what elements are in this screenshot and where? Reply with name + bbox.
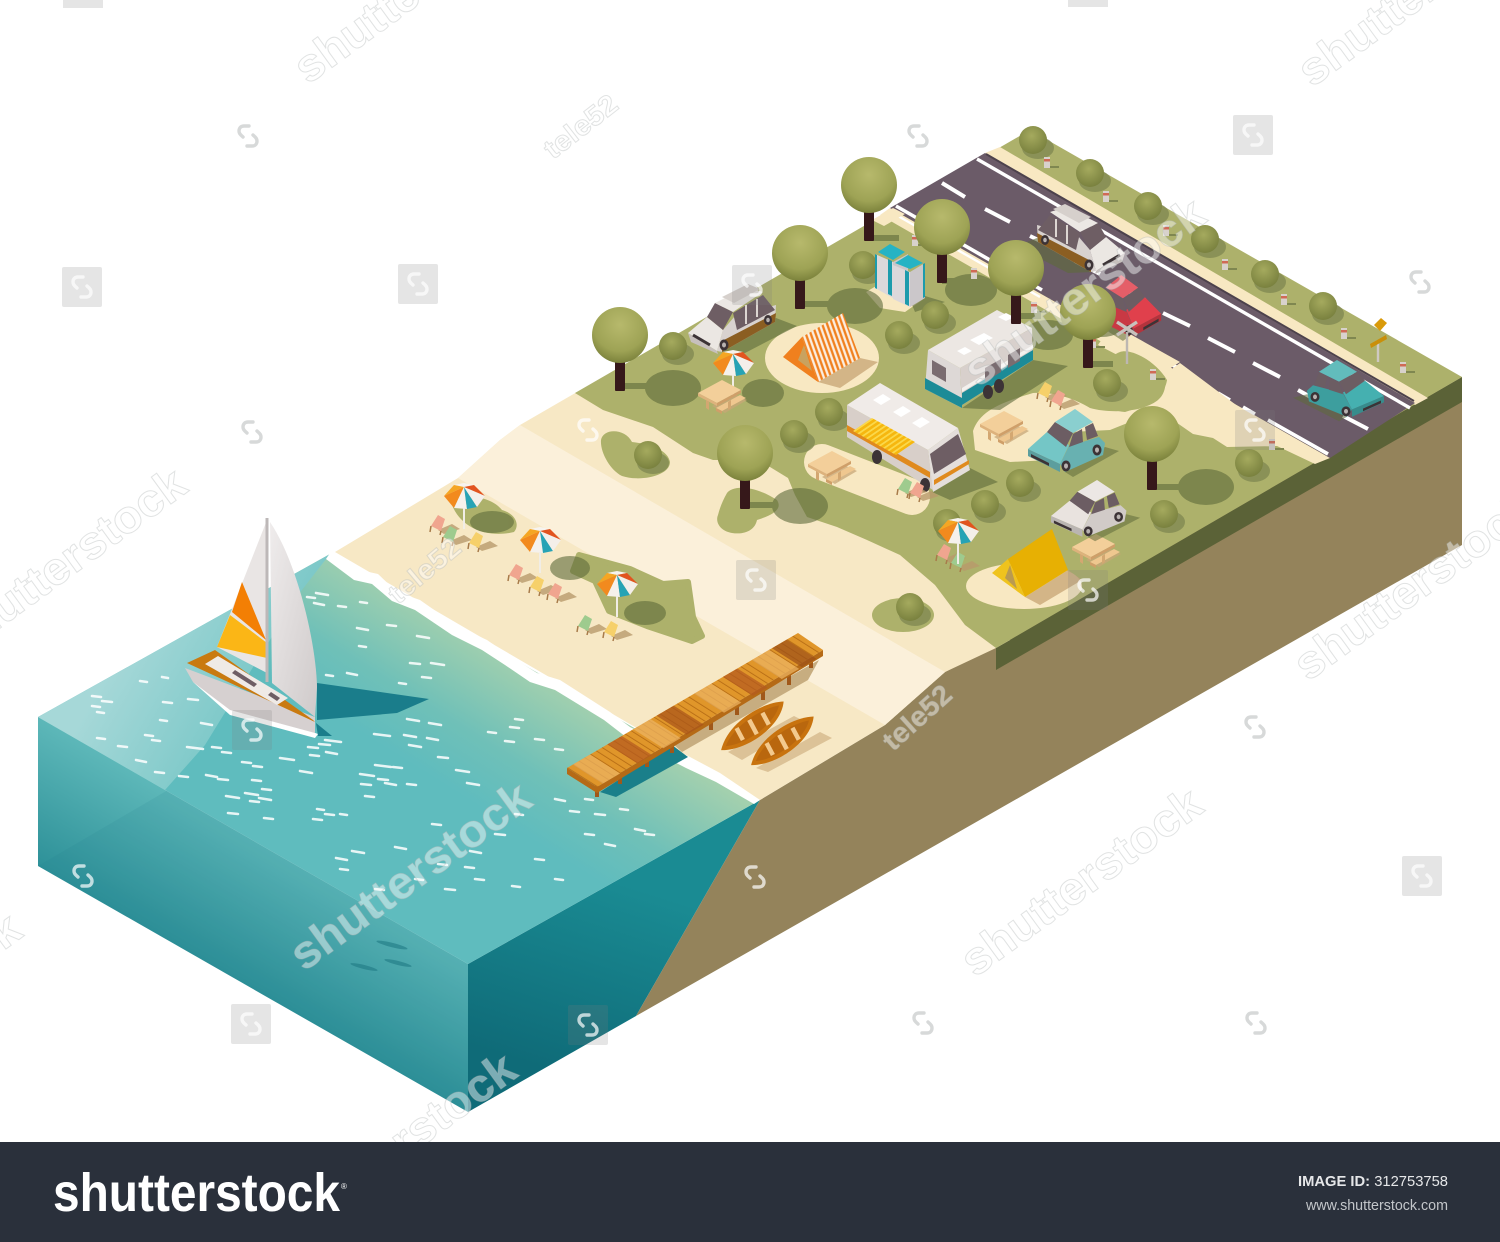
toilet pad xyxy=(866,276,925,312)
toilet 1 xyxy=(875,254,893,298)
grass patch by umbrella 1 xyxy=(452,497,517,534)
red car xyxy=(1084,275,1161,341)
tele52 watermarks: tele52 xyxy=(538,88,624,165)
roadside bollards xyxy=(912,157,1415,450)
dock posts xyxy=(597,660,811,797)
shallow water wedge xyxy=(38,554,330,790)
faint swirl marks on white xyxy=(239,126,1429,1033)
motorhome xyxy=(847,383,970,492)
rowing boat 2 xyxy=(742,712,823,771)
deck cabin xyxy=(205,656,288,705)
dock plank tones xyxy=(573,640,816,784)
shutterstock watermarks: shutterstock xyxy=(953,186,1215,396)
orange tent xyxy=(783,313,878,388)
trailer side xyxy=(960,328,1033,405)
grass patch under bush xyxy=(872,598,934,632)
sail yellow panel xyxy=(217,615,267,658)
tele52 watermarks: tele52 xyxy=(382,531,467,610)
lower beach xyxy=(335,380,1010,800)
footer logo: shutterstock xyxy=(53,1163,341,1223)
footer bar xyxy=(0,1142,1500,1242)
bush row back xyxy=(1019,126,1054,159)
sand path to road xyxy=(973,363,1315,464)
awning xyxy=(853,418,915,455)
picnic tables and umbrellas camp xyxy=(698,350,1121,568)
grass island by road xyxy=(1092,351,1167,412)
motorhome wheels xyxy=(872,450,882,464)
cliff brown side xyxy=(636,377,1462,1016)
road cars xyxy=(1016,204,1384,421)
deck wood xyxy=(187,650,315,722)
water ripples xyxy=(92,593,654,890)
yellow tent xyxy=(992,529,1082,605)
centre dashes xyxy=(942,183,1368,429)
shoulder patch xyxy=(1098,324,1180,376)
sail shadow xyxy=(317,683,429,720)
shoulder inset near tree xyxy=(872,208,905,226)
asphalt xyxy=(890,153,1415,458)
fish silhouettes xyxy=(350,939,412,972)
trailer roof xyxy=(928,310,1032,368)
grass patch under lower tree xyxy=(717,488,779,533)
dock deck xyxy=(567,633,823,787)
sail orange panel xyxy=(232,582,266,640)
tent striped roof xyxy=(802,313,860,382)
teal car on road xyxy=(1293,360,1384,421)
water block xyxy=(38,554,760,1112)
ground shadows xyxy=(470,238,1234,625)
road xyxy=(880,147,1428,464)
jib sail xyxy=(270,522,317,717)
grass side band xyxy=(996,377,1462,670)
toilet 2 xyxy=(893,265,910,307)
hull xyxy=(185,668,315,733)
mast xyxy=(266,518,268,682)
trunk shadows xyxy=(620,238,1182,505)
wagon on road xyxy=(1016,204,1125,274)
clearing orange tent xyxy=(765,323,879,393)
sand shoulders xyxy=(985,147,1428,405)
bushes in camp xyxy=(659,332,694,365)
trailer windows xyxy=(932,348,1020,382)
teal car parked xyxy=(1028,409,1119,477)
sand paths and clearings xyxy=(765,208,1315,609)
back edge lines xyxy=(977,159,1410,408)
footer image id: IMAGE ID: 312753758 xyxy=(1298,1173,1448,1190)
dock side beam xyxy=(567,650,823,793)
grass patch with bush xyxy=(601,431,670,478)
watermark logo tiles xyxy=(62,0,1442,1045)
beach furniture xyxy=(430,483,638,641)
trailer caravan xyxy=(925,310,1033,408)
motorhome side xyxy=(847,405,933,490)
trees xyxy=(592,157,1180,509)
trailer wheels xyxy=(983,385,993,399)
tele52 watermarks xyxy=(382,88,958,756)
light beach strip xyxy=(458,425,945,725)
portable toilets xyxy=(875,244,925,307)
road sign xyxy=(1370,318,1387,362)
dock xyxy=(567,633,823,797)
main sail xyxy=(217,520,267,673)
footer site url: www.shutterstock.com xyxy=(1305,1197,1448,1214)
parked cars xyxy=(1028,409,1140,541)
tent end xyxy=(783,337,818,382)
water surface xyxy=(38,554,760,964)
parked wagon xyxy=(688,284,797,354)
tele52 watermarks: tele52 xyxy=(876,679,958,756)
grass plain xyxy=(575,130,1462,648)
white car parked xyxy=(1051,480,1140,541)
clearing yellow tent xyxy=(966,563,1082,609)
grass patch by umbrella 3 xyxy=(573,555,702,641)
camp chairs xyxy=(897,382,1080,572)
crossing sign xyxy=(1117,322,1137,364)
bow foam xyxy=(193,682,318,738)
picnic clearing xyxy=(822,462,912,497)
sailboat xyxy=(185,518,429,738)
boats xyxy=(712,697,832,772)
vehicle shadows xyxy=(962,360,1068,410)
rowing boat 1 xyxy=(712,697,793,756)
dock water shadow xyxy=(600,745,688,797)
water right face xyxy=(468,800,760,1112)
umbrella camp lower xyxy=(938,518,979,564)
dock sand shadow xyxy=(672,660,819,752)
water front face xyxy=(38,717,468,1112)
beach chairs xyxy=(430,515,460,535)
surf foam xyxy=(326,553,760,804)
shutterstock watermarks: shutterstock xyxy=(279,770,541,980)
land block xyxy=(326,130,1462,1016)
watermark swirl marks xyxy=(73,125,1431,1035)
shutterstock watermarks: shutterstock xyxy=(950,776,1212,986)
beach umbrellas xyxy=(444,483,485,529)
bushes xyxy=(634,126,1344,626)
front edge lines xyxy=(896,206,1328,454)
motorhome roof xyxy=(847,383,958,450)
tree shadows xyxy=(645,370,701,406)
motorhome front xyxy=(928,428,970,492)
trailer front xyxy=(925,350,962,408)
footer registered mark: ® xyxy=(341,1182,347,1191)
